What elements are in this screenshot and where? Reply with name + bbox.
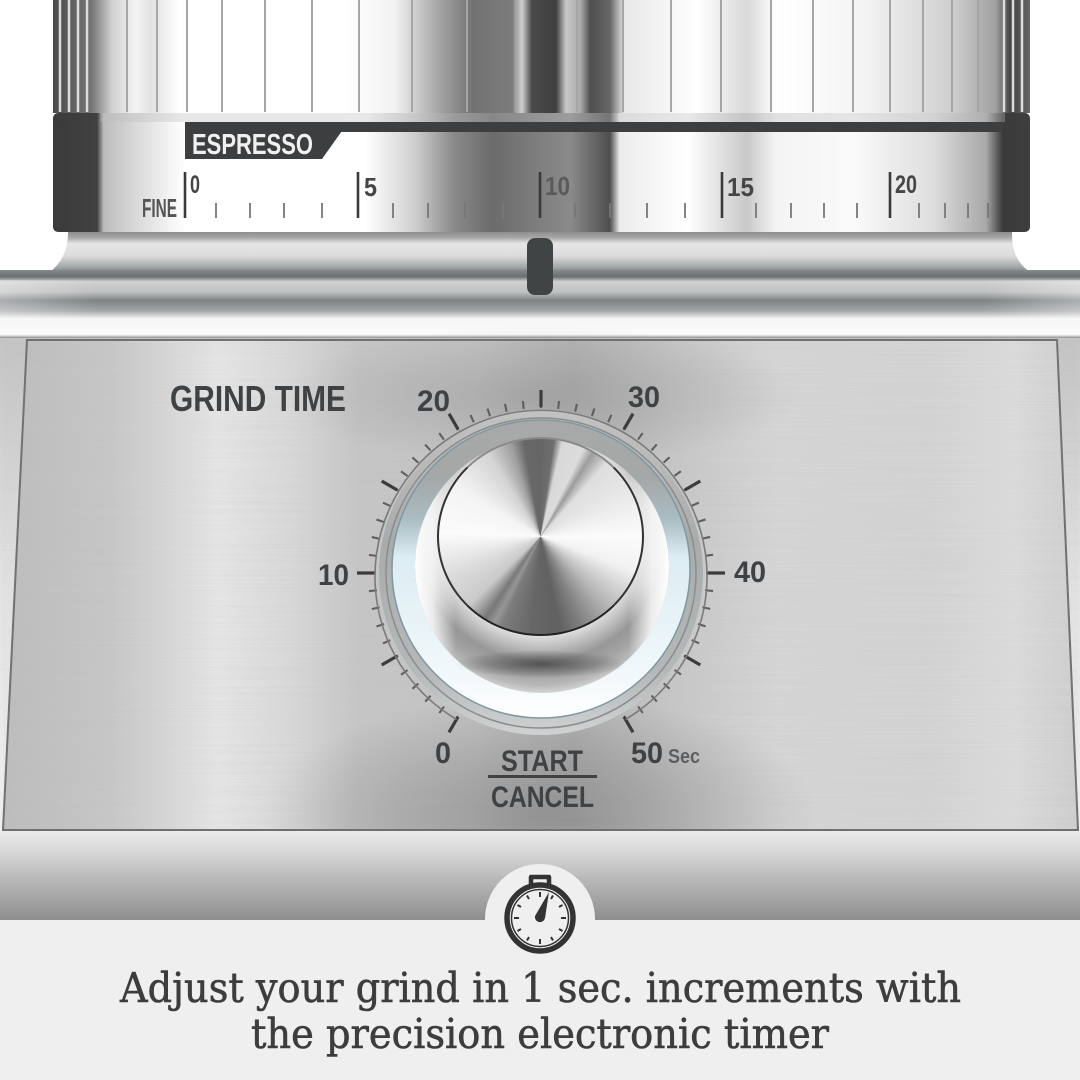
dial numbers: 30 xyxy=(628,381,660,414)
grind scale labels: 0 xyxy=(190,171,200,199)
dial numbers: 20 xyxy=(417,385,450,418)
dial numbers: 0 xyxy=(435,737,451,770)
caption text xyxy=(119,964,961,1058)
dial numbers xyxy=(318,381,766,770)
grind scale labels: 15 xyxy=(727,172,754,202)
start / cancel label: CANCEL xyxy=(491,781,594,814)
dial numbers: 10 xyxy=(318,559,349,592)
dial numbers: Sec xyxy=(668,746,700,768)
illuminated blue ring xyxy=(392,420,690,718)
dial knob with spun-metal face xyxy=(437,437,644,636)
espresso marker bar and tag: ESPRESSO xyxy=(192,129,313,161)
grind scale labels: 5 xyxy=(364,172,377,202)
grind scale ticks xyxy=(185,172,988,218)
dial major ticks xyxy=(357,390,725,732)
start / cancel label xyxy=(488,745,597,814)
caption band xyxy=(0,920,1080,1080)
body shelf xyxy=(0,270,1080,338)
dial minor ticks xyxy=(372,404,710,719)
icon: stopwatch xyxy=(507,877,573,951)
panel heading: grind time: GRIND TIME xyxy=(170,378,346,419)
caption text: Adjust your grind in 1 sec. increments with xyxy=(119,964,961,1012)
grinder base collar xyxy=(50,232,1030,285)
dial numbers: 40 xyxy=(734,556,766,589)
grind scale labels xyxy=(142,171,917,223)
start / cancel label: START xyxy=(501,745,583,778)
grind size scale band xyxy=(53,113,1030,232)
tick base arc xyxy=(375,411,707,719)
grinder hopper collar: knurled ring xyxy=(53,0,1030,113)
dial outer ring xyxy=(379,411,703,735)
brushed metal control plate xyxy=(3,325,1078,935)
pointer mark xyxy=(527,238,553,295)
espresso marker bar and tag xyxy=(185,122,1003,161)
side body metal xyxy=(0,338,1080,832)
shelf edge highlight xyxy=(0,280,1080,320)
dial numbers: 50 xyxy=(631,737,663,770)
caption text: the precision electronic timer xyxy=(251,1010,829,1058)
base foot of grinder xyxy=(0,831,1080,921)
icon dome xyxy=(485,864,595,974)
grind scale labels: 10 xyxy=(545,171,570,201)
grind scale labels: 20 xyxy=(895,171,917,199)
grind scale labels: FINE xyxy=(142,193,177,223)
knob stem xyxy=(415,439,669,693)
